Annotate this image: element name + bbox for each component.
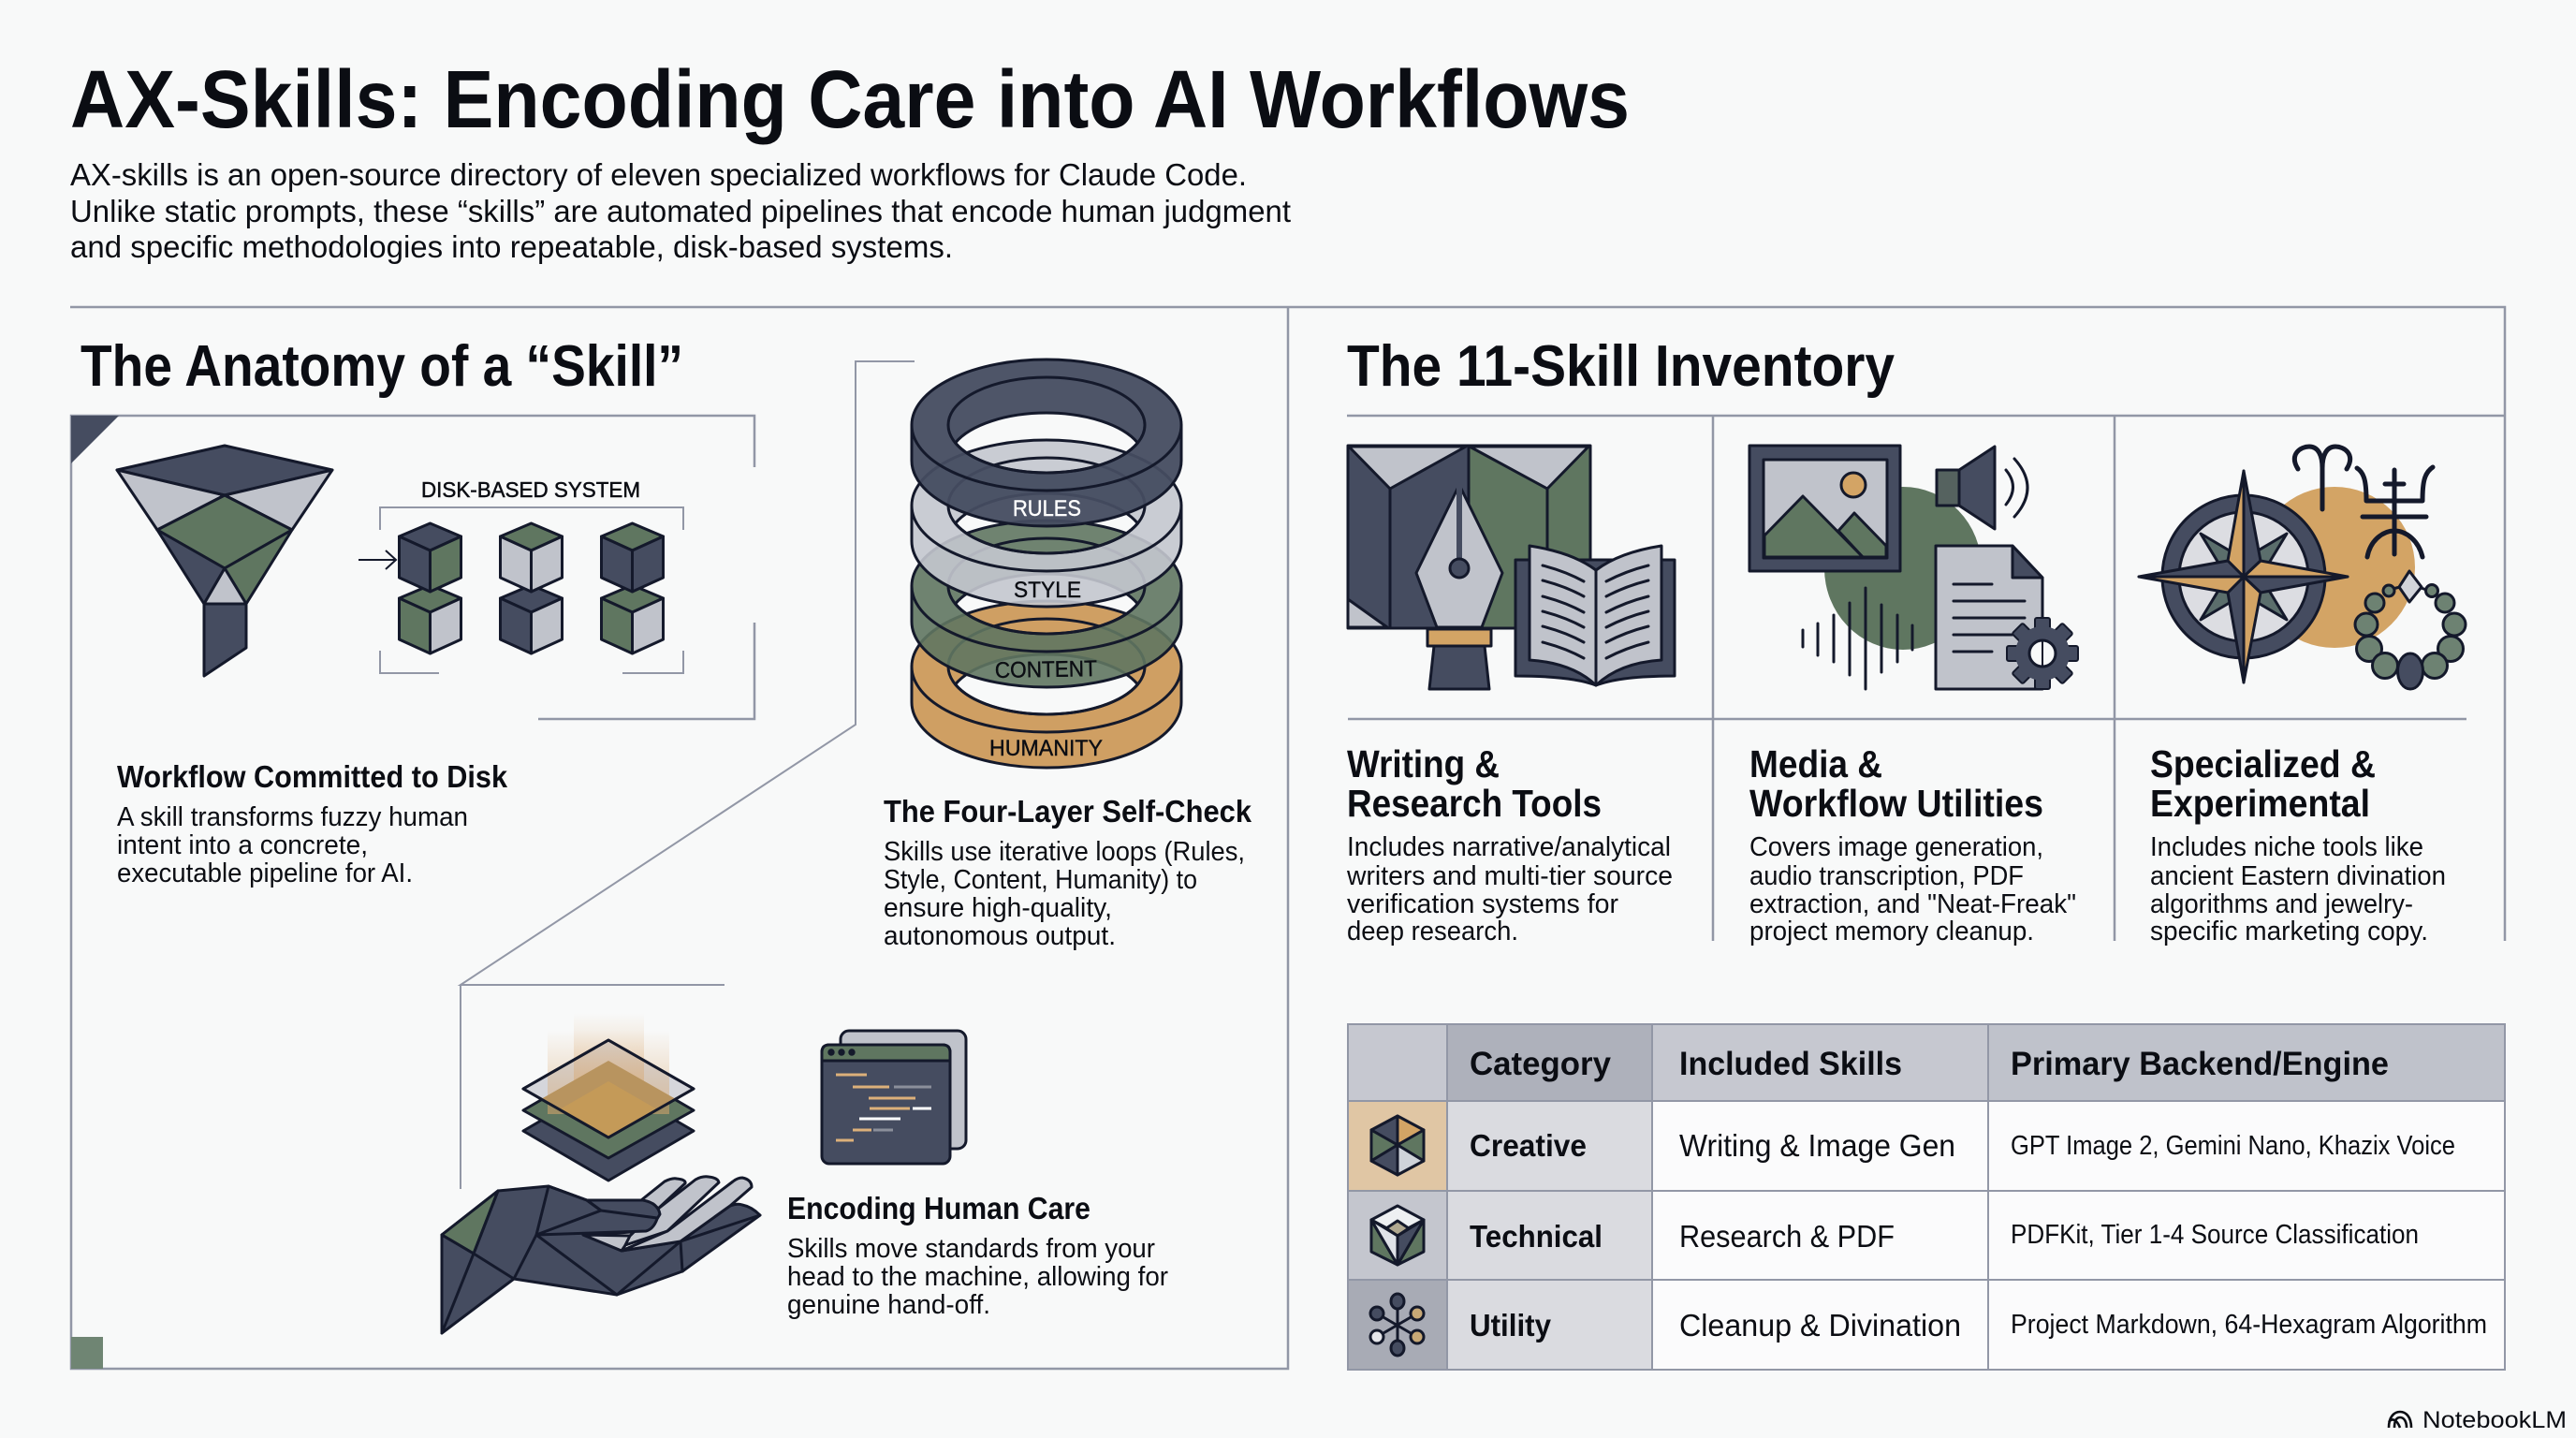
column: specialized and experimental: Specialized & (2150, 742, 2376, 785)
text: workflow committed to disk: A skill transforms fuzzy human (117, 802, 468, 832)
intro paragraph: and specific methodologies into repeatable, disk-based systems. (70, 229, 953, 264)
table row: utility: Utility (1470, 1308, 1552, 1343)
text: four-layer self-check: Style, Content, Humanity) to (884, 865, 1197, 895)
text: workflow committed to disk: intent into a concrete, (117, 830, 368, 860)
text: encoding human care: head to the machine, allowing for (787, 1262, 1168, 1292)
table row: creative: Creative (1470, 1128, 1587, 1163)
column: media and workflow utilities: Workflow Utilities (1749, 782, 2043, 825)
icon: layered diamonds with glow (523, 1013, 694, 1181)
column: writing and research tools: Research Tools (1347, 782, 1602, 825)
table row: creative: GPT Image 2, Gemini Nano, Khazix Voice (2011, 1131, 2455, 1161)
column: writing and research tools: writers and multi-tier source (1346, 861, 1673, 891)
column: writing and research tools: Writing & (1347, 742, 1500, 785)
column: specialized and experimental: ancient Eastern divination (2150, 861, 2446, 891)
panel frame lines (70, 307, 2505, 1369)
column: specialized and experimental: Includes niche tools like (2150, 832, 2423, 862)
heading: inventory: The 11-Skill Inventory (1347, 334, 1895, 399)
column: writing and research tools: verification systems for (1347, 889, 1618, 919)
column: media and workflow utilities: extraction, and "Neat-Freak" (1749, 889, 2076, 919)
column: media and workflow utilities: audio transcription, PDF (1749, 861, 2024, 891)
text: four-layer self-check: Skills use iterative loops (Rules, (884, 837, 1245, 867)
disk-based bracket (380, 507, 683, 673)
column: media and workflow utilities (1749, 742, 2076, 946)
column: specialized and experimental: Experimental (2150, 782, 2370, 825)
table row: technical (1371, 1206, 2419, 1265)
table row: technical: PDFKit, Tier 1-4 Source Classification (2011, 1220, 2419, 1250)
icon: funnel (117, 446, 332, 676)
icon: polygonal open hand (442, 1177, 760, 1333)
table row: utility: Project Markdown, 64-Hexagram Algorithm (2011, 1310, 2487, 1340)
icon: writing and research (1348, 446, 1675, 689)
intro paragraph: Unlike static prompts, these “skills” are automated pipelines that encode human judgment (70, 194, 1291, 228)
icon: media and workflow (1749, 446, 2078, 689)
table row: creative (1371, 1116, 2455, 1175)
chart: four-layer ring stack: RULES (1013, 496, 1081, 521)
text: workflow committed to disk (117, 759, 508, 888)
text: four-layer self-check: autonomous output. (884, 921, 1116, 951)
text: encoding human care: genuine hand-off. (787, 1290, 990, 1320)
text: four-layer self-check: The Four-Layer Self-Check (884, 794, 1252, 829)
table header row: Primary Backend/Engine (2011, 1046, 2389, 1082)
chart: four-layer ring stack: HUMANITY (989, 736, 1103, 761)
intro paragraph: AX-skills is an open-source directory of eleven specialized workflows for Claude Code. (70, 157, 1247, 192)
table header row (1470, 1046, 2389, 1082)
column: media and workflow utilities: Covers image generation, (1749, 832, 2043, 862)
text: encoding human care: Encoding Human Care (787, 1191, 1090, 1225)
column: writing and research tools: deep research. (1347, 917, 1518, 946)
heading: anatomy: The Anatomy of a “Skill” (80, 334, 683, 399)
table header row: Included Skills (1679, 1046, 1902, 1082)
column: specialized and experimental: specific marketing copy. (2150, 917, 2428, 946)
corner triangle (71, 416, 119, 463)
chart: four-layer ring stack: CONTENT (995, 656, 1097, 683)
column: specialized and experimental: algorithms and jewelry- (2150, 889, 2413, 919)
text: workflow committed to disk: Workflow Committed to Disk (117, 759, 508, 794)
text: workflow committed to disk: executable pipeline for AI. (117, 858, 413, 888)
table header row: Category (1470, 1046, 1612, 1082)
column: media and workflow utilities: project memory cleanup. (1749, 917, 2034, 946)
logo: NotebookLM: NotebookLM (2422, 1407, 2567, 1433)
column: writing and research tools: Includes narrative/analytical (1347, 832, 1671, 862)
table row: utility: Cleanup & Divination (1679, 1308, 1961, 1343)
connector line (461, 361, 915, 1189)
text: encoding human care: Skills move standards from your (787, 1234, 1155, 1264)
column: media and workflow utilities: Media & (1749, 742, 1882, 785)
text: four-layer self-check: ensure high-quality, (884, 893, 1112, 923)
table: skill categories (1348, 1024, 2505, 1370)
corner square (71, 1337, 103, 1369)
table row: technical: Research & PDF (1679, 1219, 1895, 1254)
chart: four-layer ring stack: STYLE (1014, 578, 1081, 603)
intro paragraph (70, 157, 1291, 264)
text: four-layer self-check (884, 794, 1252, 951)
label: disk-based system: DISK-BASED SYSTEM (421, 477, 640, 502)
column: specialized and experimental (2150, 742, 2446, 946)
table row: technical: Technical (1470, 1219, 1603, 1254)
icon: code window (822, 1031, 966, 1164)
icon: six cubes (399, 523, 663, 653)
text: encoding human care (787, 1191, 1168, 1320)
table row: creative: Writing & Image Gen (1679, 1128, 1955, 1163)
column: writing and research tools (1346, 742, 1673, 946)
arrow into disk system (359, 550, 396, 569)
table row: utility (1370, 1294, 2487, 1356)
chart: four-layer ring stack (912, 360, 1181, 768)
title: AX-Skills: Encoding Care into AI Workflows (70, 54, 1630, 145)
icon: compass, symbols and bracelet (2139, 447, 2466, 689)
